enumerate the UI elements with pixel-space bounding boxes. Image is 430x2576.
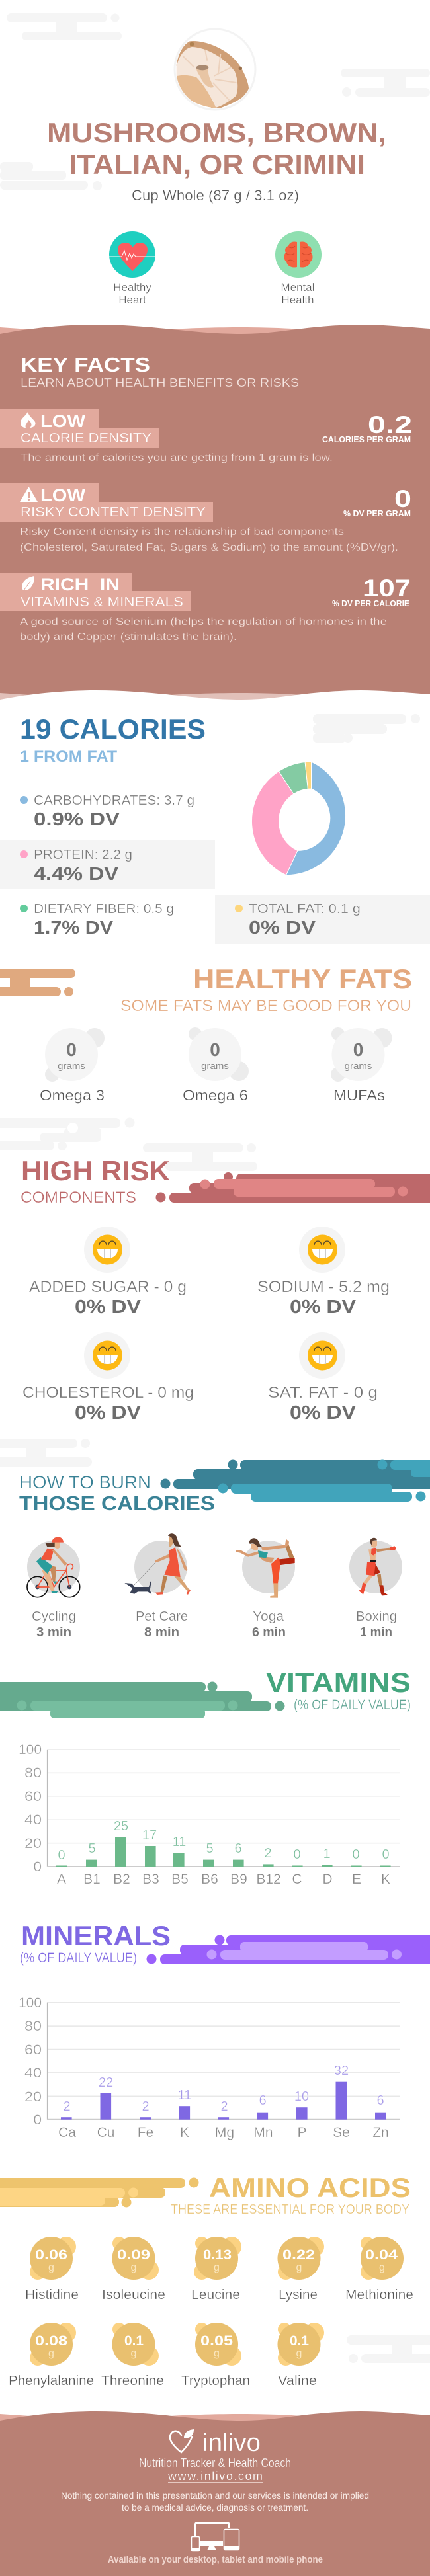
macro: dietary fiber: DIETARY FIBER: 0.5 g — [34, 902, 174, 916]
heading: key facts: KEY FACTS — [21, 353, 150, 376]
serving size subtitle: Cup Whole (87 g / 3.1 oz) — [132, 187, 299, 204]
bar chart: minerals: 2 — [63, 2099, 71, 2114]
bar chart: vitamins: 6 — [234, 1841, 242, 1856]
heading: calories: 19 CALORIES — [20, 713, 206, 745]
amino: isoleucine: 0.09 — [117, 2247, 150, 2263]
bar chart: vitamins: 17 — [142, 1828, 157, 1843]
benefit: mental health: Mental — [280, 281, 315, 294]
background cloud, calories — [313, 714, 420, 743]
fact: calorie density: CALORIE DENSITY — [21, 431, 151, 446]
macro: dietary fiber: 1.7% DV — [34, 917, 113, 938]
decorative banner: healthy fats — [0, 969, 75, 996]
bar chart: minerals: 80 — [24, 2019, 42, 2034]
fat: omega 3: 0 — [66, 1039, 77, 1060]
risk: saturated fat: 0% DV — [290, 1402, 357, 1424]
fact: risky content density — [0, 483, 411, 553]
sub-heading: vitamins: (% OF DAILY VALUE) — [294, 1697, 411, 1712]
bar chart: minerals: 11 — [178, 2088, 191, 2103]
activity labels: 8 min — [144, 1625, 179, 1640]
bar chart: vitamins: 25 — [114, 1819, 128, 1833]
macro: carbohydrates: 0.9% DV — [34, 809, 120, 829]
fat: omega 6: grams — [201, 1061, 229, 1072]
amino: lysine — [278, 2237, 324, 2302]
macro: dietary fiber — [20, 902, 174, 938]
icon: devices — [191, 2523, 239, 2551]
activity labels: Yoga — [253, 1609, 284, 1624]
activity: yoga — [236, 1538, 295, 1598]
bar chart: minerals: 22 — [99, 2075, 113, 2090]
fact: calorie density: LOW — [40, 411, 86, 431]
activity labels: 1 min — [360, 1625, 392, 1640]
bar chart: vitamins: B12 — [256, 1872, 281, 1887]
bar chart: minerals: 100 — [19, 1995, 42, 2011]
benefit: healthy heart: Heart — [118, 294, 146, 306]
amino: valine — [278, 2323, 324, 2388]
activity labels — [32, 1609, 397, 1640]
activity labels: Cycling — [32, 1609, 76, 1624]
fat: omega 3: Omega 3 — [40, 1087, 105, 1104]
fact: rich in vitamins and minerals: 107 — [363, 575, 411, 602]
bar chart: vitamins: 0 — [352, 1847, 360, 1862]
fact: calorie density: CALORIES PER GRAM — [322, 434, 411, 444]
bar chart: vitamins: B9 — [230, 1872, 247, 1887]
bar chart: minerals: 20 — [24, 2089, 42, 2105]
risk: sodium — [257, 1227, 390, 1318]
amino: histidine: g — [48, 2262, 54, 2273]
heading: amino acids: AMINO ACIDS — [209, 2172, 411, 2203]
fact: calorie density — [0, 409, 412, 463]
amino: leucine — [191, 2237, 241, 2302]
amino: lysine: 0.22 — [282, 2247, 315, 2263]
amino: methionine: 0.04 — [365, 2247, 398, 2263]
risk: sodium: SODIUM - 5.2 mg — [257, 1278, 390, 1296]
activity labels: 3 min — [36, 1625, 71, 1640]
background clouds, header — [0, 13, 430, 190]
bar chart: vitamins: 0 — [33, 1859, 42, 1874]
amino: histidine: Histidine — [25, 2288, 79, 2302]
benefit: mental health: Health — [281, 294, 314, 306]
fat: MUFAs: 0 — [353, 1039, 363, 1060]
fact: rich in vitamins and minerals: body) and Copper (stimulates the brain). — [20, 631, 237, 643]
bar chart: vitamins: D — [322, 1872, 333, 1887]
macro: protein — [0, 840, 215, 889]
fact: rich in vitamins and minerals: VITAMINS & MINERALS — [21, 595, 183, 610]
bar chart: vitamins: 100 — [19, 1742, 42, 1757]
background cloud, amino acids — [347, 2335, 430, 2363]
bar chart: minerals: K — [180, 2125, 189, 2140]
amino: tryptophan: 0.05 — [200, 2333, 233, 2349]
risk: cholesterol: CHOLESTEROL - 0 mg — [22, 1384, 194, 1402]
bar chart: minerals: Zn — [372, 2125, 389, 2140]
risk: cholesterol — [22, 1332, 194, 1424]
bar chart: minerals: 6 — [259, 2093, 267, 2108]
bar chart: vitamins: 40 — [24, 1812, 42, 1828]
risk: added sugar — [29, 1227, 187, 1318]
bar chart: vitamins: 80 — [24, 1765, 42, 1781]
bar chart: minerals: Fe — [138, 2125, 153, 2140]
activity labels: Boxing — [356, 1609, 397, 1624]
logo: inlivo: inlivo — [202, 2429, 261, 2457]
website: www.inlivo.com — [167, 2470, 263, 2483]
fat: omega 3: grams — [58, 1061, 85, 1072]
disclaimer: Nothing contained in this presentation and our services is intended or implied — [61, 2490, 369, 2501]
bar chart: vitamins: 0 — [382, 1847, 390, 1862]
disclaimer — [61, 2490, 369, 2513]
bar chart: vitamins: 1 — [323, 1847, 331, 1861]
bar chart: minerals: 32 — [334, 2064, 349, 2078]
fat: MUFAs: MUFAs — [333, 1087, 385, 1104]
bar chart: vitamins: B5 — [171, 1872, 189, 1887]
amino: lysine: Lysine — [279, 2288, 318, 2302]
heading: high risk: HIGH RISK — [21, 1155, 170, 1186]
panel: footer — [0, 2411, 430, 2576]
amino: methionine — [345, 2237, 413, 2302]
activity: boxing — [349, 1538, 402, 1595]
fact: calorie density: 0.2 — [368, 411, 412, 438]
activity: cycling — [27, 1537, 80, 1597]
bar chart: minerals: Se — [333, 2125, 350, 2140]
fact: risky content density: 0 — [394, 485, 411, 512]
amino: phenylalanine: Phenylalanine — [9, 2374, 94, 2388]
food image: mushroom — [175, 29, 255, 110]
sub-heading: LEARN ABOUT HEALTH BENEFITS OR RISKS — [21, 376, 299, 389]
heading: vitamins: VITAMINS — [266, 1667, 411, 1698]
fact: risky content density: (Cholesterol, Saturated Fat, Sugars & Sodium) to the amount (%DV/gr). — [20, 542, 398, 553]
fat: omega 6 — [183, 1027, 249, 1104]
bar chart: vitamins — [19, 1742, 400, 1887]
decorative banner: amino acids — [0, 2178, 198, 2207]
fact: calorie density: The amount of calories you are getting from 1 gram is low. — [21, 452, 333, 463]
fact: risky content density: LOW — [40, 485, 86, 505]
risk: saturated fat — [268, 1332, 378, 1424]
decorative banner: high risk — [156, 1172, 430, 1203]
amino: valine: g — [296, 2348, 302, 2359]
bar chart: minerals: 10 — [294, 2089, 309, 2104]
bar chart: vitamins: B2 — [113, 1872, 130, 1887]
bar chart: minerals: 40 — [24, 2066, 42, 2081]
fact: rich in vitamins and minerals: A good source of Selenium (helps the regulation of hormones in the — [20, 616, 387, 627]
sub-heading: components: COMPONENTS — [21, 1189, 136, 1207]
amino: phenylalanine: g — [48, 2348, 54, 2359]
heading: how to burn those calories — [19, 1472, 215, 1515]
amino: histidine: 0.06 — [35, 2247, 67, 2263]
amino: leucine: Leucine — [191, 2288, 240, 2302]
amino: phenylalanine: 0.08 — [35, 2333, 67, 2349]
panel: key facts — [0, 325, 430, 707]
fact: rich in vitamins and minerals: RICH IN — [40, 575, 120, 594]
activity: pet care — [124, 1533, 191, 1595]
decorative banner: burn calories — [160, 1460, 430, 1502]
macro: carbohydrates — [20, 793, 194, 829]
background clouds, high risk — [0, 1117, 257, 1171]
sub-heading: amino acids: THESE ARE ESSENTIAL FOR YOUR BODY — [171, 2202, 409, 2217]
heading: how to burn those calories: THOSE CALORIES — [19, 1492, 215, 1515]
amino: leucine: 0.13 — [203, 2247, 232, 2263]
benefit: healthy heart: Healthy — [113, 281, 151, 294]
bar chart: minerals: Cu — [97, 2125, 114, 2140]
bar chart: vitamins: K — [381, 1872, 390, 1887]
amino: tryptophan: Tryptophan — [181, 2374, 250, 2388]
bar chart: vitamins: 0 — [58, 1848, 65, 1863]
risk: added sugar: 0% DV — [75, 1297, 142, 1318]
bar chart: vitamins: B6 — [201, 1872, 218, 1887]
bar chart: vitamins: A — [57, 1872, 66, 1887]
amino: methionine: g — [379, 2262, 385, 2273]
macro: protein: PROTEIN: 2.2 g — [34, 848, 132, 862]
bar chart: vitamins: C — [292, 1872, 302, 1887]
fact: risky content density: % DV PER GRAM — [343, 508, 411, 518]
fat: MUFAs — [331, 1027, 392, 1104]
macro: carbohydrates: CARBOHYDRATES: 3.7 g — [34, 793, 194, 808]
tagline: Nutrition Tracker & Health Coach — [139, 2456, 291, 2470]
amino: threonine — [101, 2323, 164, 2388]
activity labels: Pet Care — [136, 1609, 188, 1624]
amino: threonine: g — [131, 2348, 136, 2359]
bar chart: vitamins: E — [352, 1872, 361, 1887]
amino: threonine: Threonine — [101, 2374, 164, 2388]
heading: healthy fats: HEALTHY FATS — [193, 963, 412, 994]
logo: inlivo — [170, 2429, 261, 2457]
bar chart: vitamins: 5 — [206, 1841, 214, 1856]
title: MUSHROOMS, BROWN, — [47, 117, 386, 148]
bar chart: minerals: 6 — [376, 2093, 384, 2108]
risk: saturated fat: SAT. FAT - 0 g — [268, 1384, 378, 1402]
fact: risky content density: RISKY CONTENT DENSITY — [21, 505, 206, 520]
fat: omega 3 — [40, 1028, 105, 1104]
macro: protein: 4.4% DV — [34, 864, 118, 884]
amino: histidine — [25, 2237, 79, 2302]
amino: isoleucine: Isoleucine — [102, 2288, 165, 2302]
bar chart: vitamins: 2 — [264, 1846, 272, 1861]
amino: threonine: 0.1 — [124, 2333, 144, 2349]
bar chart: minerals: Mn — [253, 2125, 273, 2140]
bar chart: vitamins: B3 — [142, 1872, 159, 1887]
sub-heading: healthy fats: SOME FATS MAY BE GOOD FOR YOU — [120, 997, 411, 1015]
benefit: healthy heart — [109, 231, 155, 306]
amino: tryptophan — [181, 2323, 250, 2388]
disclaimer: to be a medical advice, diagnosis or treatment. — [122, 2502, 308, 2513]
fat: omega 6: Omega 6 — [183, 1087, 248, 1104]
amino: lysine: g — [296, 2262, 302, 2273]
title — [47, 117, 386, 180]
fact: rich in vitamins and minerals — [0, 573, 411, 643]
bar chart: vitamins: 0 — [293, 1847, 301, 1862]
bar chart: minerals: Ca — [58, 2125, 76, 2140]
heading: how to burn those calories: HOW TO BURN — [19, 1472, 151, 1492]
activity labels: 6 min — [252, 1625, 286, 1640]
bar chart: minerals: P — [297, 2125, 307, 2140]
risk: added sugar: ADDED SUGAR - 0 g — [29, 1278, 187, 1296]
bar chart: minerals: 60 — [24, 2042, 42, 2058]
title: ITALIAN, OR CRIMINI — [69, 149, 365, 180]
risk: cholesterol: 0% DV — [75, 1402, 142, 1424]
fat: omega 6: 0 — [210, 1039, 220, 1060]
amino: phenylalanine — [9, 2323, 94, 2388]
benefit: mental health — [275, 231, 322, 306]
amino: isoleucine: g — [131, 2262, 136, 2273]
fat: MUFAs: grams — [345, 1061, 372, 1072]
amino: methionine: Methionine — [345, 2288, 413, 2302]
bar chart: vitamins: B1 — [83, 1872, 101, 1887]
amino: isoleucine — [102, 2237, 165, 2302]
fact: rich in vitamins and minerals: % DV PER CALORIE — [332, 598, 409, 608]
macro: total fat — [215, 895, 430, 944]
macro: total fat: TOTAL FAT: 0.1 g — [249, 902, 361, 916]
bar chart: vitamins: 20 — [24, 1836, 42, 1851]
fact: risky content density: Risky Content density is the relationship of bad components — [20, 526, 344, 538]
risk: sodium: 0% DV — [290, 1297, 357, 1318]
chart: macronutrient donut — [251, 762, 346, 875]
bar chart: vitamins: 60 — [24, 1789, 42, 1804]
amino: tryptophan: g — [214, 2348, 220, 2359]
bar chart: minerals — [19, 1995, 400, 2140]
macro: total fat: 0% DV — [249, 917, 316, 938]
amino: leucine: g — [214, 2262, 220, 2273]
amino: valine: Valine — [278, 2374, 317, 2388]
bar chart: vitamins: 5 — [88, 1841, 96, 1856]
bar chart: minerals: 0 — [33, 2113, 42, 2128]
heading: minerals: MINERALS — [21, 1920, 171, 1951]
decorative banner: minerals — [147, 1935, 430, 1964]
bar chart: minerals: Mg — [215, 2125, 234, 2140]
bar chart: minerals: 2 — [142, 2099, 150, 2114]
bar chart: vitamins: 11 — [173, 1835, 186, 1849]
decorative banner: vitamins — [0, 1682, 284, 1718]
bar chart: minerals: 2 — [220, 2099, 228, 2114]
background cloud, burn — [0, 1439, 92, 1467]
sub-heading: calories from fat: 1 FROM FAT — [20, 748, 117, 766]
availability note: Available on your desktop, tablet and mobile phone — [108, 2554, 323, 2565]
sub-heading: minerals: (% OF DAILY VALUE) — [20, 1951, 137, 1966]
amino: valine: 0.1 — [290, 2333, 309, 2349]
